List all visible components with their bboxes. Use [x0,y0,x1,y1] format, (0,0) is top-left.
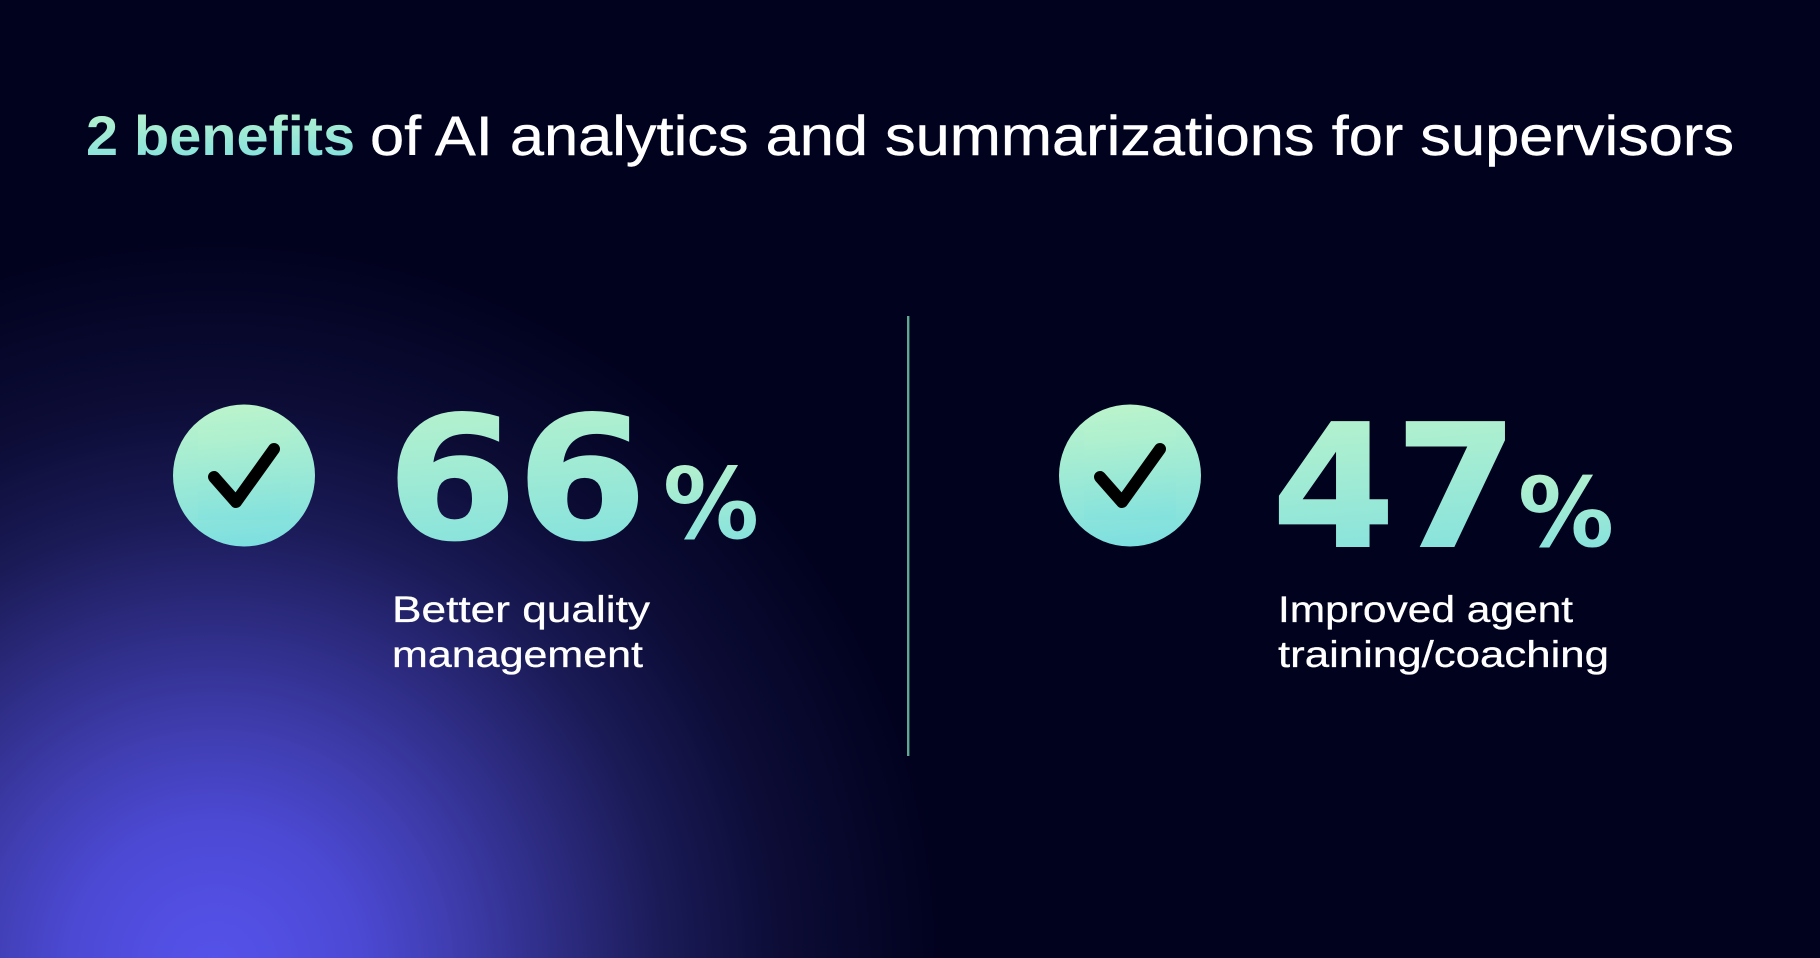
title remainder: of AI analytics and summarizations for supervisors [370,104,1734,167]
percent sign: % [663,448,759,562]
label: training/coaching [1278,634,1609,675]
label: management [392,634,644,675]
number: 47: 47 [1272,389,1518,587]
percent sign: % [1518,457,1614,569]
stat: 47% improved agent training/coaching [1059,389,1614,675]
icon: check badge [1059,404,1201,546]
number: 66: 66 [387,381,647,579]
title highlight: 2 benefits: 2 benefits [86,104,355,167]
icon: check badge [173,404,315,546]
title [86,104,1734,167]
stat: 66% better quality management [173,381,759,675]
label: Improved agent [1278,589,1574,630]
divider [907,316,909,756]
label: Better quality [392,589,651,630]
